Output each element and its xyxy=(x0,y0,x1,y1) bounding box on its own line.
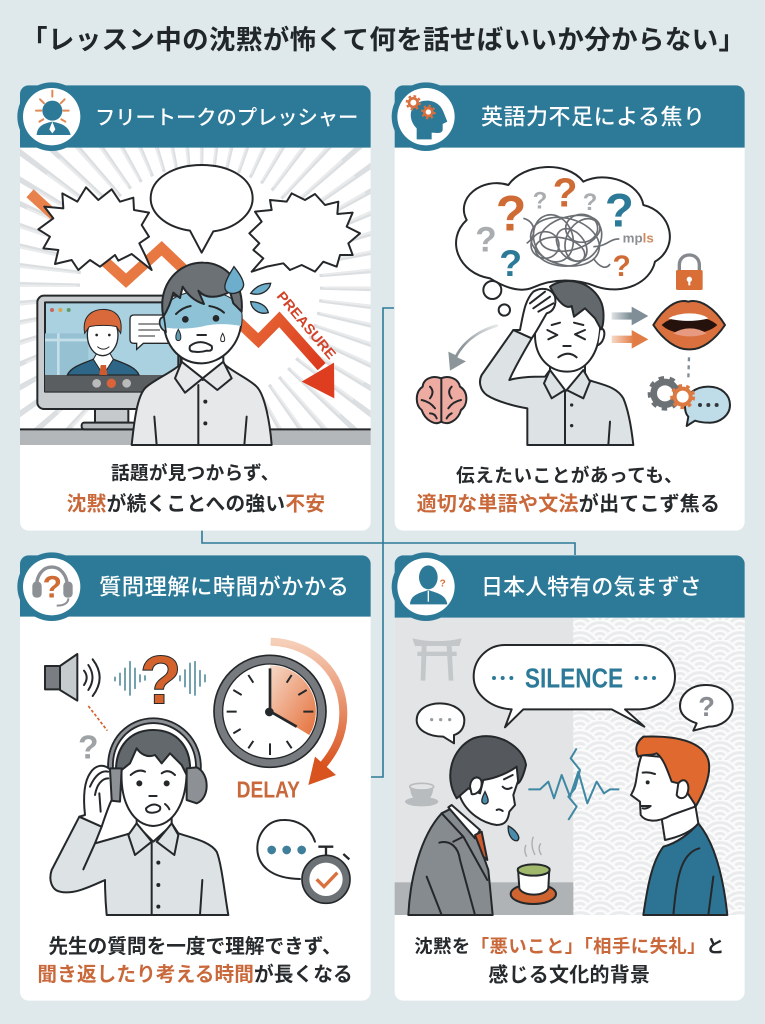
panel background xyxy=(395,555,745,1001)
panel background xyxy=(20,555,371,1001)
panel header xyxy=(392,82,745,151)
silence speech bubble: SILENCE xyxy=(525,663,623,694)
header title: 質問理解に時間がかかる xyxy=(99,575,349,600)
sound waves xyxy=(115,662,205,695)
icon: headset question xyxy=(32,567,73,606)
icon: person with question: ? xyxy=(440,579,446,590)
arrow pair to mouth xyxy=(612,307,648,349)
icon: headset question: ? xyxy=(43,568,62,604)
caption: 伝えたいことがあっても、 xyxy=(456,465,683,486)
caption: 感じる文化的背景 xyxy=(488,963,650,987)
caption: 先生の質問を一度で理解できず、 xyxy=(48,936,342,958)
headphones xyxy=(101,721,207,803)
caption xyxy=(414,936,724,987)
thought cloud: ? xyxy=(553,170,577,216)
panel background xyxy=(20,85,371,531)
thought cloud: ? xyxy=(499,242,522,284)
big question mark: ? xyxy=(140,642,182,718)
empty oval bubble centre xyxy=(151,165,253,253)
bowing businessman xyxy=(408,736,526,915)
caption xyxy=(67,463,325,515)
panel: Japanese awkwardness xyxy=(392,552,745,1001)
confused man xyxy=(480,281,633,445)
thought cloud: ? xyxy=(533,187,547,214)
arrow label: PREASURE xyxy=(274,288,340,362)
thought cloud: ? xyxy=(475,221,497,260)
green tea cup xyxy=(511,864,556,904)
icon: padlock xyxy=(676,255,703,290)
delay label: DELAY xyxy=(237,776,300,802)
caption xyxy=(37,936,353,986)
question marks: ? xyxy=(496,186,526,242)
panel header xyxy=(17,82,371,151)
panel: free talk pressure xyxy=(17,82,371,531)
panel header xyxy=(392,552,745,621)
caption: 話題が見つからず、 xyxy=(111,463,279,484)
dashed link xyxy=(88,706,107,731)
icon: gears xyxy=(650,378,694,409)
panel header xyxy=(17,552,371,621)
icon: person with question xyxy=(410,565,447,604)
monitor with video call xyxy=(37,296,181,429)
small question mark: ? xyxy=(78,729,99,766)
caption: 適切な単語や文法が出てこず焦る xyxy=(417,492,720,516)
icon: brain xyxy=(417,377,466,423)
delay arc arrow xyxy=(271,642,343,785)
thought cloud: ? xyxy=(583,189,597,216)
icon: open mouth xyxy=(653,301,725,349)
question bubble xyxy=(680,685,733,731)
empty burst bubble left xyxy=(38,187,152,270)
thought cloud xyxy=(456,167,670,316)
caption: 沈黙を「悪いこと」「相手に失礼」と xyxy=(414,936,724,957)
dotted link xyxy=(685,357,692,378)
tangled scribble xyxy=(523,209,619,273)
sunburst background xyxy=(20,148,370,428)
panel background xyxy=(395,85,745,531)
header title: フリートークのプレッシャー xyxy=(95,106,358,129)
desk xyxy=(20,429,371,445)
screen speech bubble xyxy=(130,315,170,349)
icon: stressed person xyxy=(36,91,71,135)
icon: gray curved arrow xyxy=(448,324,498,371)
panel: slow question understanding xyxy=(17,552,371,1001)
panel: lack of English ability xyxy=(392,82,745,531)
thought cloud: ? xyxy=(613,250,631,283)
connector lines xyxy=(202,308,575,777)
title: 「レッスン中の沈黙が怖くて何を話せばいいか分からない」 xyxy=(21,25,745,55)
falling pressure arrow xyxy=(30,193,340,398)
question bubble: ? xyxy=(698,691,715,722)
icon: grey tea cup xyxy=(405,783,438,806)
icon: chat bubble with dots xyxy=(685,387,730,426)
caption: 沈黙が続くことへの強い不安 xyxy=(67,492,325,515)
icon: speaker xyxy=(45,654,100,701)
teacher on screen xyxy=(67,309,139,375)
header title: 日本人特有の気まずさ xyxy=(481,575,702,600)
anxious man xyxy=(132,263,272,445)
small dots bubble xyxy=(417,703,464,743)
header title: 英語力不足による焦り xyxy=(481,105,705,130)
tension zigzag xyxy=(528,748,619,820)
empty burst bubble right xyxy=(249,193,360,272)
garbled word: mpls xyxy=(623,231,654,246)
clock xyxy=(214,655,326,767)
caption: 聞き返したり考える時間が長くなる xyxy=(37,963,353,986)
icon: chat bubble and stopwatch xyxy=(257,820,350,903)
icon: torii gate xyxy=(412,638,462,681)
thought cloud: ? xyxy=(605,185,634,238)
caption xyxy=(417,465,720,516)
silence speech bubble xyxy=(474,645,675,727)
man with headphones xyxy=(50,721,228,915)
steam xyxy=(525,837,541,857)
split scene background xyxy=(395,618,745,915)
western man xyxy=(631,736,727,915)
icon: head with gears xyxy=(407,96,447,139)
sweat drops xyxy=(225,267,271,313)
